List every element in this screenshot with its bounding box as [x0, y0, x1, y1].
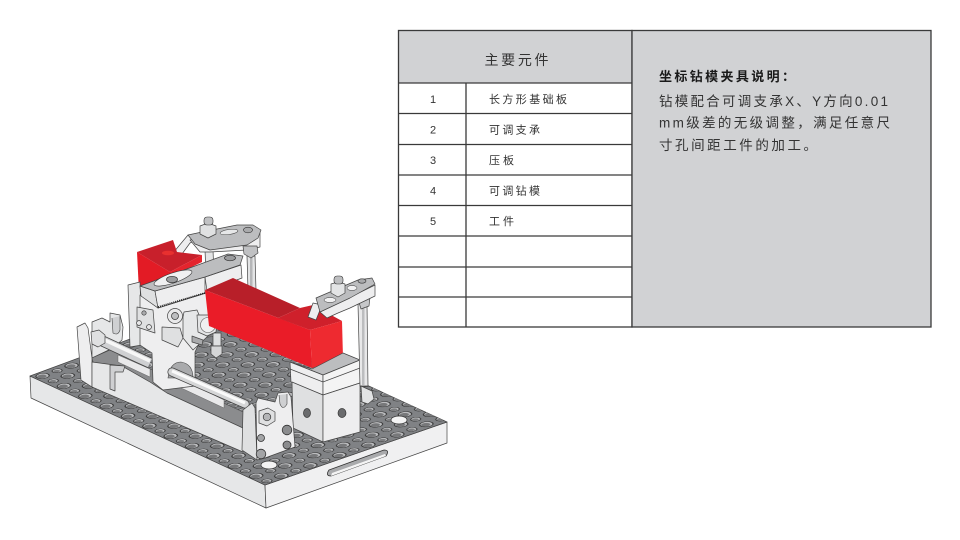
- right end bracket with screws: [242, 392, 295, 460]
- illustration: coordinate drill jig assembly: [30, 217, 447, 508]
- description body: 寸孔间距工件的加工。: [659, 138, 817, 153]
- description heading: 坐标钻模夹具说明：: [659, 69, 795, 84]
- base plate: [30, 311, 447, 508]
- through holes and slot: [261, 461, 277, 469]
- table header: [398, 30, 632, 83]
- row 5: [430, 215, 514, 228]
- row 1: [430, 92, 567, 106]
- table grid lines: [398, 30, 632, 327]
- row 3: [430, 153, 514, 167]
- top nut and bolt: [200, 223, 216, 238]
- table: main components: [398, 30, 632, 327]
- description body: 钻模配合可调支承X、Y方向0.01: [659, 94, 888, 109]
- row 2: [430, 124, 540, 136]
- central riser block: [128, 282, 210, 390]
- red workpiece: long block: [205, 278, 343, 368]
- row 1: 1: [430, 94, 436, 106]
- row 4: [430, 184, 540, 198]
- description body: [659, 94, 890, 153]
- row 3: 3: [430, 155, 436, 167]
- adjusting yoke, boss and nut: [168, 308, 217, 350]
- row 4: 4: [430, 186, 436, 198]
- left slotted bracket: [77, 313, 123, 387]
- row 5: 5: [430, 216, 436, 228]
- right support post and clamp arm: [308, 276, 375, 404]
- row 4: 可调钻模: [489, 184, 540, 198]
- rod nut: [91, 330, 105, 347]
- long base wall with notch: [92, 362, 243, 452]
- red workpiece: back block: [137, 240, 202, 292]
- row 1: 长方形基础板: [489, 92, 567, 106]
- grey channel behind rods: [92, 350, 243, 428]
- row 2: 可调支承: [489, 124, 540, 136]
- row 5: 工件: [489, 215, 514, 228]
- long guide rods: [91, 330, 245, 404]
- back support posts: [205, 250, 256, 358]
- row 2: 2: [430, 124, 436, 136]
- right support block: [290, 353, 360, 442]
- row 3: 压板: [489, 153, 514, 167]
- table header: 主要元件: [484, 52, 548, 68]
- drill template with toothed edge: [140, 254, 243, 308]
- description body: mm级差的无级调整，满足任意尺: [659, 114, 890, 130]
- small adjustment plate with screws: [137, 307, 155, 333]
- panel: jig description: [632, 30, 931, 327]
- back clamp arm: [173, 217, 261, 258]
